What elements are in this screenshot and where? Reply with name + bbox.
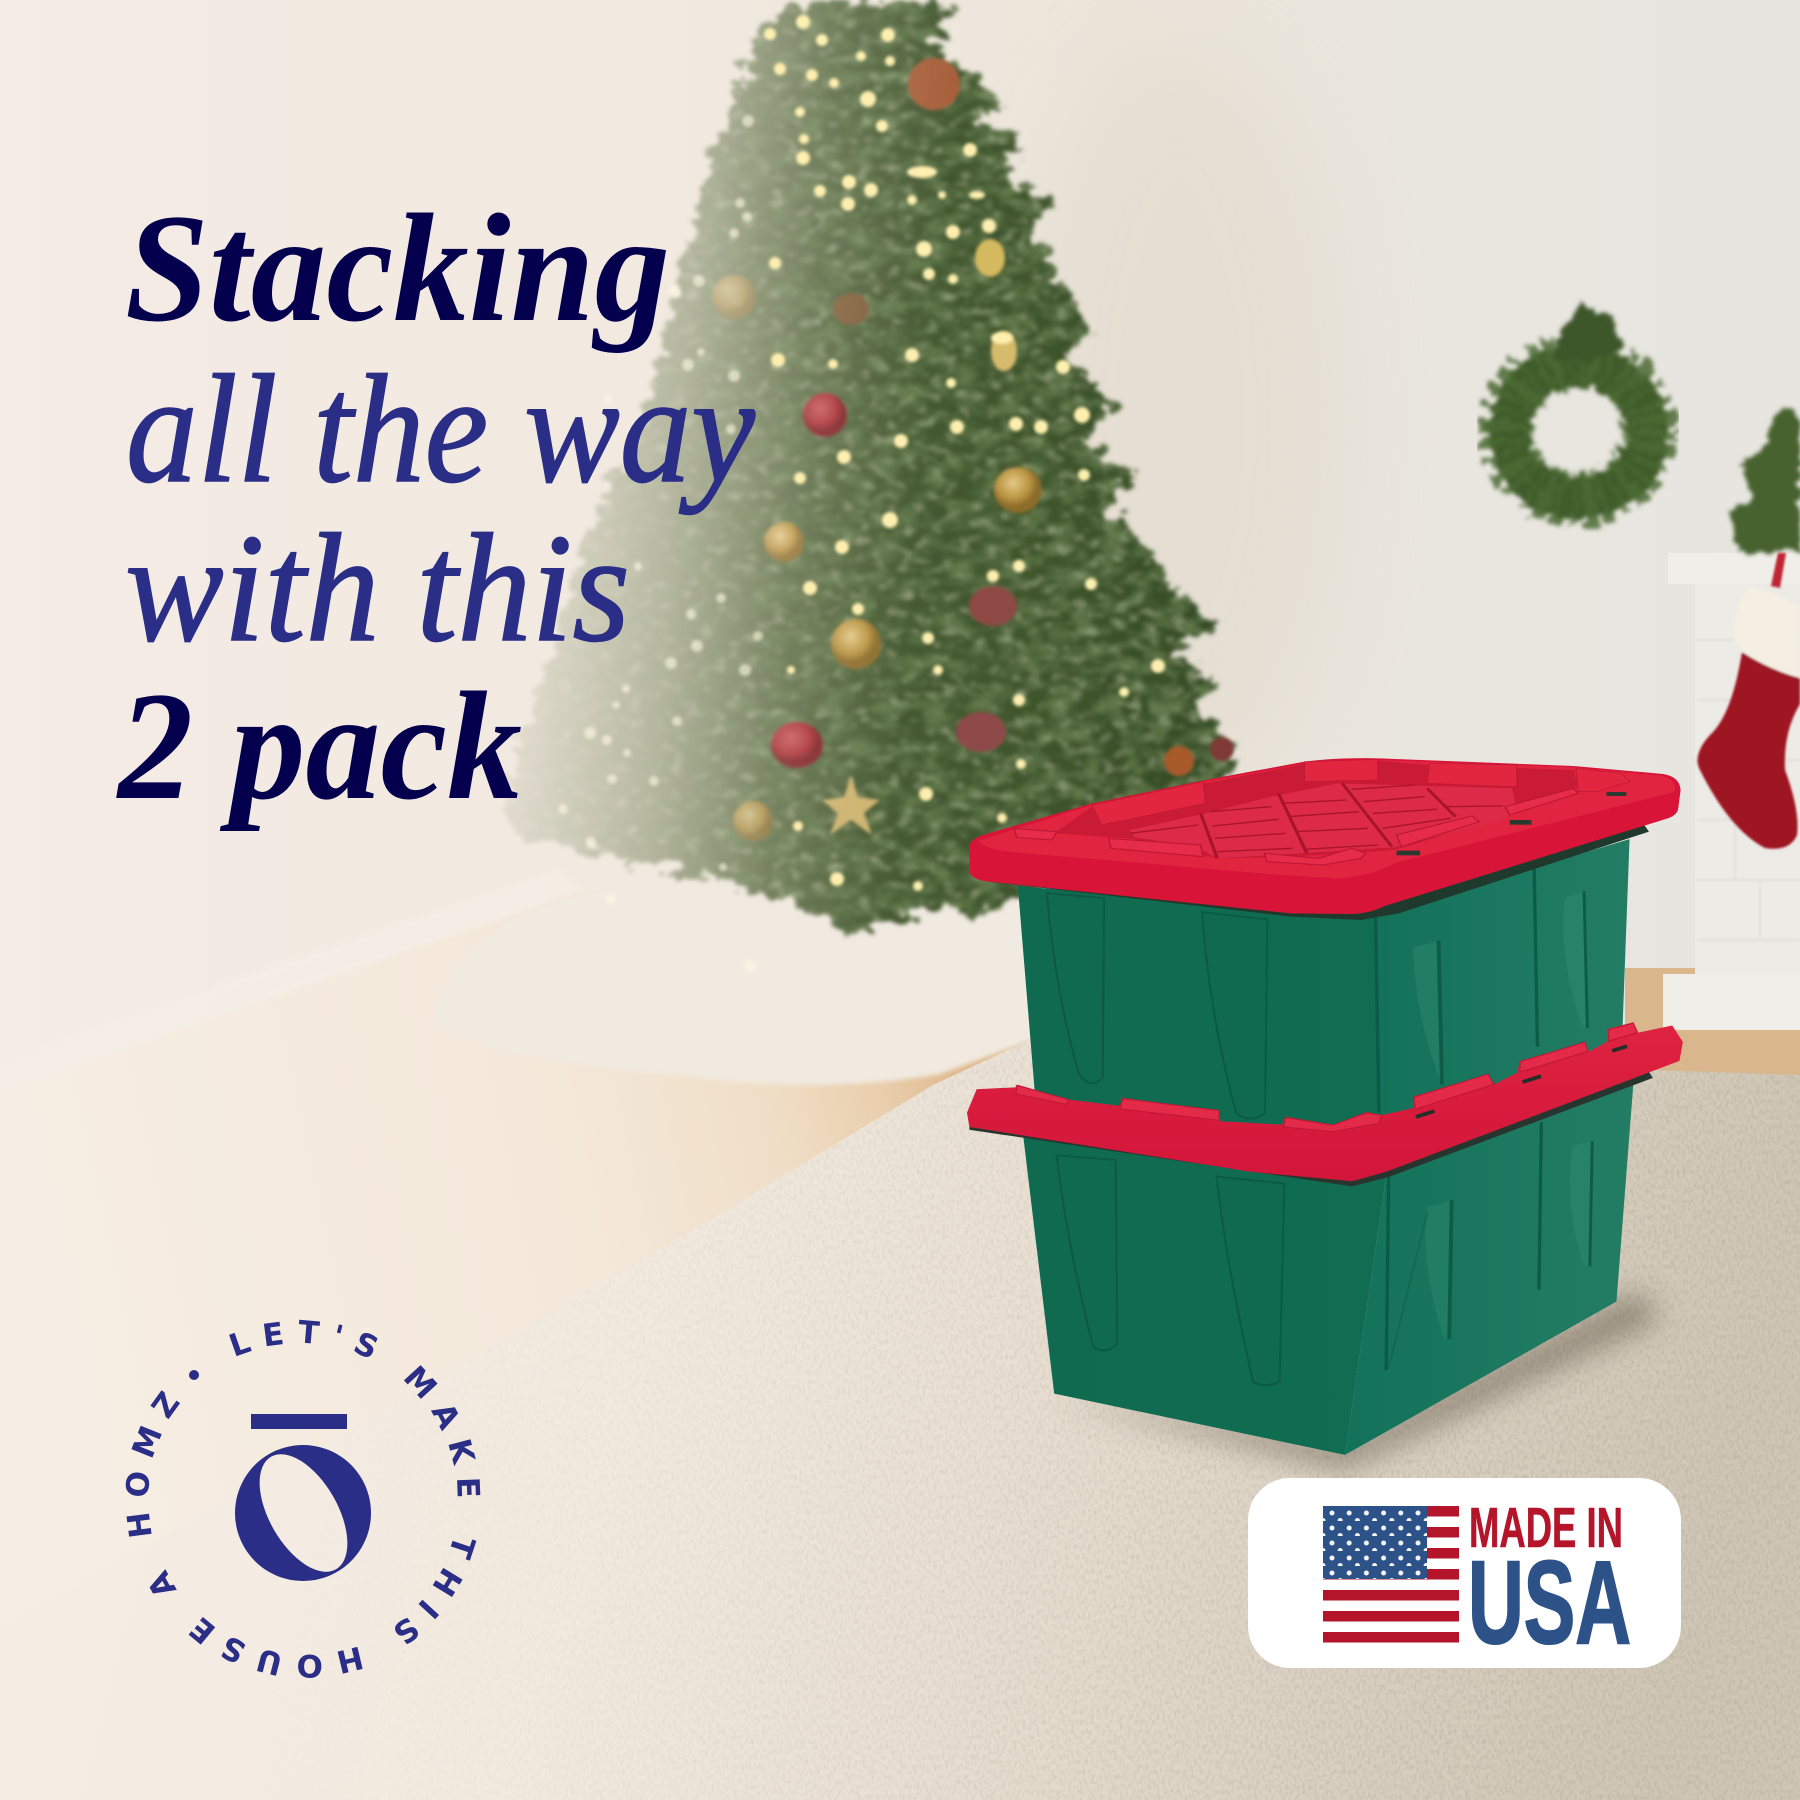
lid lugs <box>1014 788 1578 865</box>
circular tagline: LET'S MAKE THIS HOUSE A HOMZ <box>126 1320 480 1678</box>
lid grid lines <box>1130 783 1503 858</box>
lid holes <box>1397 792 1626 855</box>
top lid <box>969 758 1681 920</box>
headline line 2: all the way <box>126 343 755 515</box>
lid back walls <box>1092 759 1630 825</box>
tree foliage <box>500 0 1232 937</box>
made in label: MADE IN <box>1469 1496 1623 1560</box>
soft wall shading right of the tree <box>1010 40 1350 800</box>
rug <box>486 1040 1800 1800</box>
fireplace and right wood floor <box>1625 553 1800 1080</box>
bottom box body <box>1023 1070 1634 1455</box>
lid recessed panel <box>1130 783 1517 858</box>
tagline dot <box>189 1370 199 1380</box>
tree lights <box>558 15 1165 972</box>
ornaments <box>712 58 1234 841</box>
christmas tree <box>500 0 1234 937</box>
bottom lid rim <box>967 1022 1683 1186</box>
mantel greenery <box>1730 405 1800 552</box>
logo letter o <box>235 1445 371 1581</box>
stacked green and red storage boxes <box>967 758 1683 1455</box>
tree skirt <box>432 880 1060 1085</box>
usa label: USA <box>1468 1537 1631 1669</box>
wood floor <box>0 891 1050 1800</box>
headline line 4: 2 pack <box>116 660 522 832</box>
lid body <box>969 758 1681 914</box>
headline line 3: with this <box>125 502 630 674</box>
top box body <box>1018 839 1630 1160</box>
us flag <box>1323 1506 1459 1642</box>
made in usa badge <box>1248 1478 1681 1669</box>
lid rim surface <box>979 760 1675 878</box>
brand badge <box>126 1320 480 1678</box>
lid edge shadow <box>988 825 1649 920</box>
lid inner wall <box>1054 761 1578 858</box>
baseboard fading into the fog <box>0 868 582 1092</box>
wreath on wall <box>1506 304 1650 500</box>
logo bar <box>251 1414 347 1429</box>
storage box shadow on the rug <box>1054 1290 1660 1470</box>
headline line 1: Stacking <box>125 182 670 354</box>
stocking <box>1698 553 1800 849</box>
headline <box>116 182 755 832</box>
badge background <box>1248 1478 1681 1668</box>
